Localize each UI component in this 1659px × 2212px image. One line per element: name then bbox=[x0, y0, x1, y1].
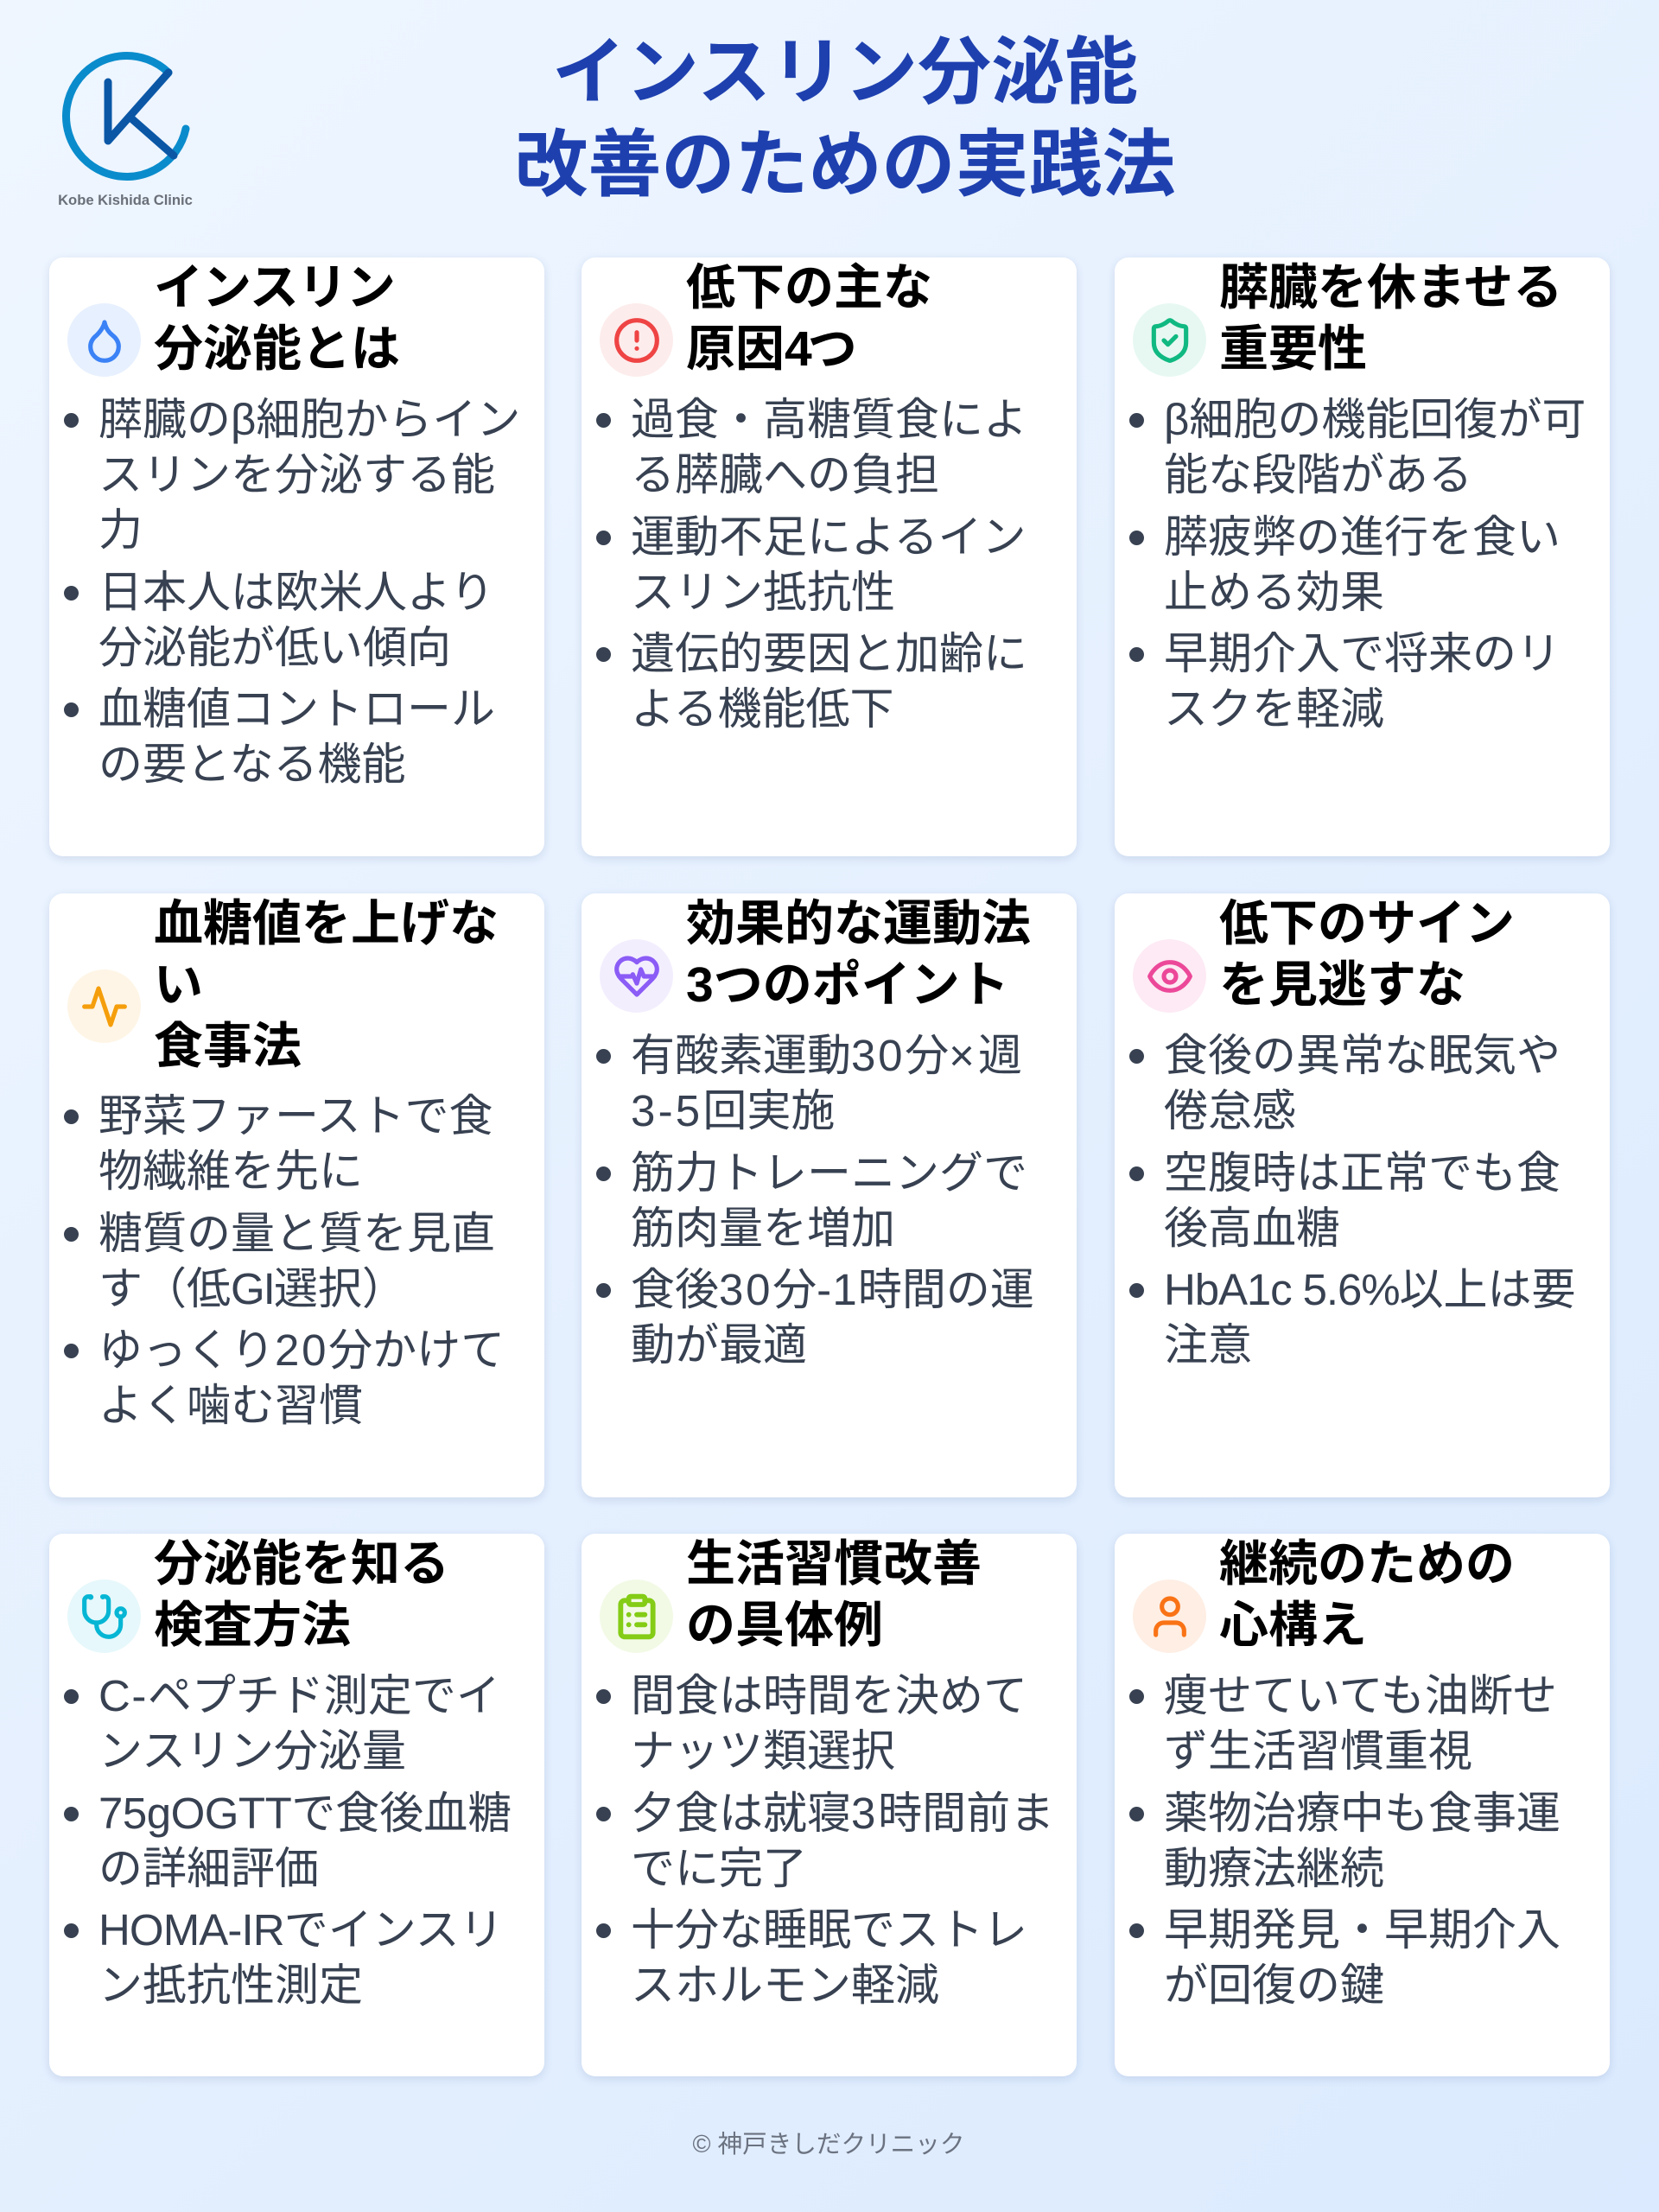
bullet list bbox=[596, 395, 1027, 734]
bullet list bbox=[1129, 1671, 1560, 2010]
bullet list: 倦怠感 bbox=[1164, 1086, 1296, 1135]
heading: い bbox=[154, 957, 203, 1013]
heading bbox=[1219, 260, 1562, 377]
heading bbox=[1219, 1536, 1515, 1653]
bullet list: HOMA-IRでインスリ bbox=[99, 1905, 504, 1955]
panel: exercise bbox=[582, 893, 1077, 1497]
bullet list: スリンを分泌する能 bbox=[99, 450, 495, 499]
heading: 継続のための bbox=[1219, 1536, 1515, 1592]
panel: tests bbox=[49, 1534, 544, 2076]
bullet list: 膵臓のβ細胞からイン bbox=[99, 395, 520, 444]
bullet list: 糖質の量と質を見直 bbox=[99, 1208, 495, 1258]
heading: を見逃すな bbox=[1219, 957, 1465, 1013]
bullet list: 過食・高糖質食によ bbox=[631, 395, 1027, 444]
panel: diet bbox=[49, 893, 544, 1497]
heading bbox=[686, 896, 1031, 1013]
bullet list: ず生活習慣重視 bbox=[1164, 1726, 1472, 1776]
logo: Kobe Kishida Clinic bbox=[58, 52, 193, 208]
icon: shield check bbox=[1133, 303, 1206, 377]
bullet list: HbA1c 5.6%以上は要 bbox=[1164, 1265, 1576, 1314]
bullet list: β細胞の機能回復が可 bbox=[1164, 395, 1586, 444]
bullet list: 十分な睡眠でストレ bbox=[631, 1905, 1027, 1955]
bullet list: 動が最適 bbox=[631, 1320, 807, 1370]
heading: 分泌能を知る bbox=[154, 1536, 449, 1592]
bullet list: 間食は時間を決めて bbox=[631, 1671, 1027, 1720]
heading: 3つのポイント bbox=[686, 957, 1009, 1013]
bullet list: 日本人は欧米人より bbox=[99, 567, 494, 617]
bullet list bbox=[596, 1671, 1054, 2010]
bullet list: スクを軽減 bbox=[1164, 684, 1384, 734]
bullet list: が回復の鍵 bbox=[1164, 1961, 1384, 2010]
title: 改善のための実践法 bbox=[514, 124, 1175, 207]
icon: alert bbox=[600, 303, 673, 377]
heading: 心構え bbox=[1219, 1598, 1367, 1653]
bullet list: 運動不足によるイン bbox=[631, 512, 1026, 562]
heading: 重要性 bbox=[1219, 321, 1367, 377]
heading bbox=[686, 1536, 982, 1653]
bullet list bbox=[64, 1671, 512, 2010]
icon: person bbox=[1133, 1580, 1206, 1653]
icon: stethoscope bbox=[67, 1580, 141, 1653]
panel: causes bbox=[582, 257, 1077, 856]
heading bbox=[154, 1536, 449, 1653]
heading: 低下のサイン bbox=[1219, 896, 1515, 951]
bullet list: 分泌能が低い傾向 bbox=[99, 622, 451, 672]
bullet list: 早期介入で将来のリ bbox=[1164, 629, 1560, 678]
bullet list: 食後の異常な眠気や bbox=[1164, 1031, 1560, 1080]
heading: インスリン bbox=[154, 260, 395, 315]
icon: clipboard bbox=[600, 1580, 673, 1653]
bullet list: 能な段階がある bbox=[1164, 450, 1472, 499]
icon: water drop bbox=[67, 303, 141, 377]
bullet list: 食後30分-1時間の運 bbox=[631, 1265, 1034, 1314]
bullet list bbox=[64, 1091, 505, 1430]
bullet list: よく噛む習慣 bbox=[99, 1381, 363, 1430]
bullet list: 注意 bbox=[1164, 1320, 1252, 1370]
bullet list: ナッツ類選択 bbox=[631, 1726, 895, 1776]
bullet list: 3-5回実施 bbox=[631, 1086, 835, 1135]
bullet list: 後高血糖 bbox=[1164, 1203, 1340, 1253]
bullet list: スホルモン軽減 bbox=[631, 1961, 939, 2010]
heading bbox=[686, 260, 932, 377]
bullet list: よる機能低下 bbox=[631, 684, 893, 734]
bullet list: でに完了 bbox=[631, 1844, 807, 1892]
panel: pancreas rest bbox=[1115, 257, 1610, 856]
heading: の具体例 bbox=[686, 1598, 883, 1653]
heading: 低下の主な bbox=[686, 260, 932, 315]
bullet list: す（低GI選択） bbox=[99, 1263, 406, 1313]
bullet list: の要となる機能 bbox=[99, 740, 405, 789]
bullet list bbox=[64, 395, 520, 789]
heading: 食事法 bbox=[154, 1019, 302, 1074]
bullet list: ン抵抗性測定 bbox=[99, 1961, 363, 2010]
bullet list: 夕食は就寝3時間前ま bbox=[631, 1789, 1054, 1837]
bullet list: 筋力トレーニングで bbox=[631, 1147, 1027, 1198]
bullet list: スリン抵抗性 bbox=[631, 567, 895, 617]
bullet list: 膵疲弊の進行を食い bbox=[1164, 512, 1560, 562]
heading: 効果的な運動法 bbox=[686, 896, 1031, 951]
bullet list: 薬物治療中も食事運 bbox=[1164, 1789, 1560, 1837]
bullet list: 力 bbox=[99, 505, 143, 555]
bullet list: ゆっくり20分かけて bbox=[99, 1325, 505, 1375]
panel: lifestyle bbox=[582, 1534, 1077, 2076]
bullet list: 動療法継続 bbox=[1164, 1844, 1384, 1892]
heading: 分泌能とは bbox=[154, 321, 400, 377]
bullet list: 空腹時は正常でも食 bbox=[1164, 1147, 1560, 1198]
bullet list: C-ペプチド測定でイ bbox=[99, 1671, 500, 1720]
bullet list: 物繊維を先に bbox=[99, 1147, 363, 1196]
bullet list: 早期発見・早期介入 bbox=[1164, 1905, 1560, 1955]
icon: eye bbox=[1133, 939, 1206, 1013]
bullet list: の詳細評価 bbox=[99, 1844, 319, 1892]
logo: Kobe Kishida Clinic: Kobe Kishida Clinic bbox=[58, 192, 193, 208]
heading: 膵臓を休ませる bbox=[1219, 260, 1562, 315]
title: インスリン分泌能 bbox=[552, 32, 1138, 114]
title bbox=[514, 32, 1175, 207]
icon: activity bbox=[67, 969, 141, 1043]
heading bbox=[1219, 896, 1515, 1013]
bullet list bbox=[596, 1031, 1034, 1370]
heading bbox=[154, 260, 400, 377]
bullet list: 痩せていても油断せ bbox=[1164, 1671, 1557, 1720]
panel: warning signs bbox=[1115, 893, 1610, 1497]
icon: heart pulse bbox=[600, 939, 673, 1013]
heading: 検査方法 bbox=[154, 1598, 351, 1653]
bullet list bbox=[1129, 1031, 1576, 1370]
heading bbox=[154, 896, 499, 1074]
heading: 原因4つ bbox=[686, 321, 857, 377]
bullet list: る膵臓への負担 bbox=[631, 450, 939, 499]
bullet list: 血糖値コントロール bbox=[99, 684, 495, 734]
footer: © 神戸きしだクリニック bbox=[693, 2131, 964, 2158]
bullet list bbox=[1129, 395, 1586, 734]
bullet list: 75gOGTTで食後血糖 bbox=[99, 1789, 512, 1837]
bullet list: 野菜ファーストで食 bbox=[99, 1091, 493, 1141]
panel: mindset bbox=[1115, 1534, 1610, 2076]
bullet list: 止める効果 bbox=[1164, 567, 1384, 617]
bullet list: 筋肉量を増加 bbox=[631, 1203, 895, 1253]
bullet list: 遺伝的要因と加齢に bbox=[631, 629, 1027, 678]
heading: 血糖値を上げな bbox=[154, 896, 499, 951]
heading: 生活習慣改善 bbox=[686, 1536, 982, 1592]
bullet list: 有酸素運動30分×週 bbox=[631, 1031, 1022, 1080]
panel: insulin secretion bbox=[49, 257, 544, 856]
bullet list: ンスリン分泌量 bbox=[99, 1726, 406, 1776]
